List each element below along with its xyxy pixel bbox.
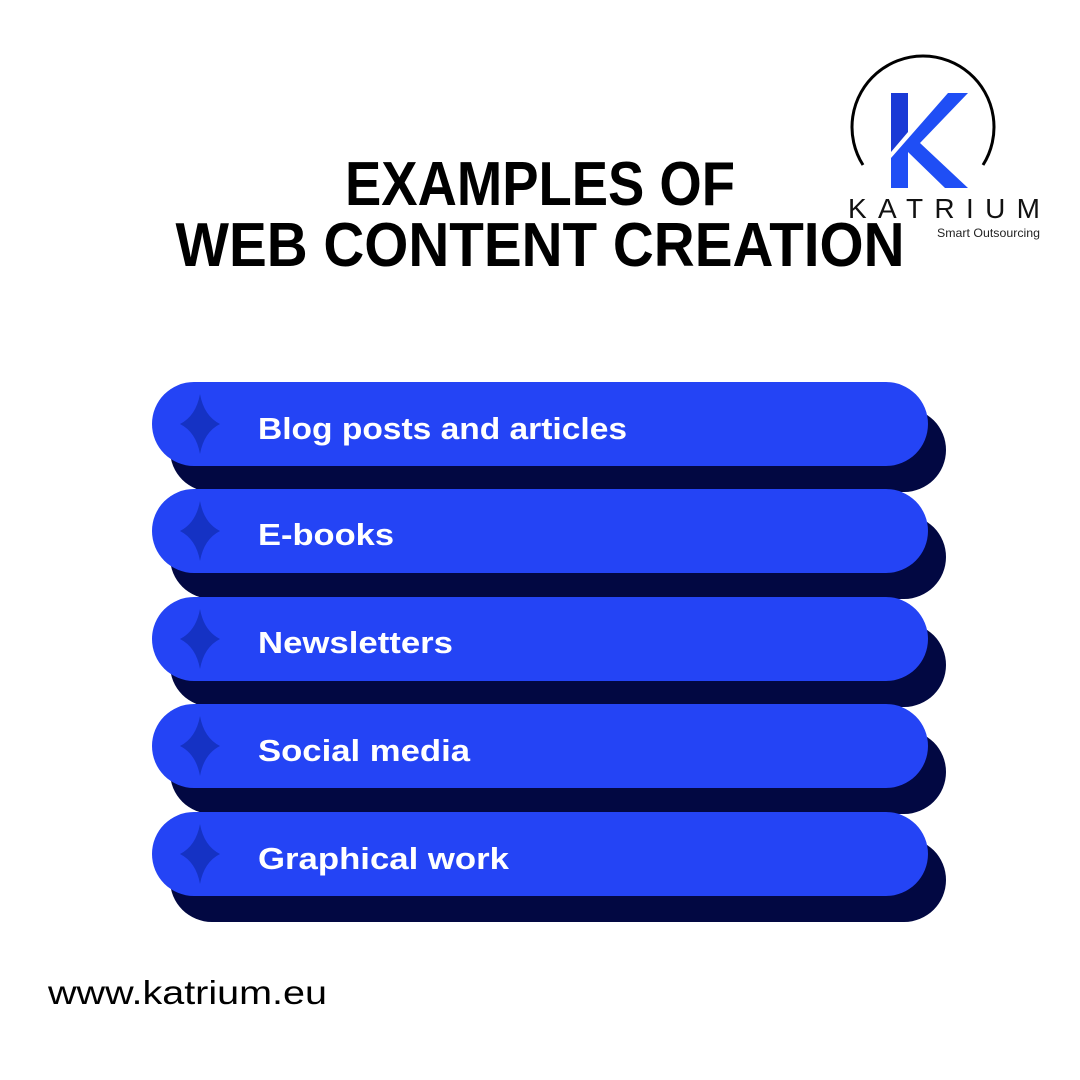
list item 2 bbox=[152, 489, 946, 599]
logo: Katrium: Smart Outsourcing bbox=[937, 226, 1040, 240]
logo: Katrium bbox=[848, 54, 1040, 240]
list item 5: Graphical work bbox=[258, 841, 510, 876]
list item 1: Blog posts and articles bbox=[258, 411, 627, 446]
logo: Katrium: KATRIUM bbox=[848, 193, 1040, 224]
title bbox=[176, 150, 904, 280]
list item 4: Social media bbox=[258, 733, 471, 768]
footer url: www.katrium.eu bbox=[47, 974, 327, 1011]
list item 1 bbox=[152, 382, 946, 492]
title: WEB CONTENT CREATION bbox=[176, 211, 904, 280]
list item 4 bbox=[152, 704, 946, 814]
list item 3 bbox=[152, 597, 946, 707]
list item 2: E-books bbox=[258, 517, 394, 552]
list item 3: Newsletters bbox=[258, 625, 453, 660]
title: EXAMPLES OF bbox=[345, 150, 735, 219]
list item 5 bbox=[152, 812, 946, 922]
